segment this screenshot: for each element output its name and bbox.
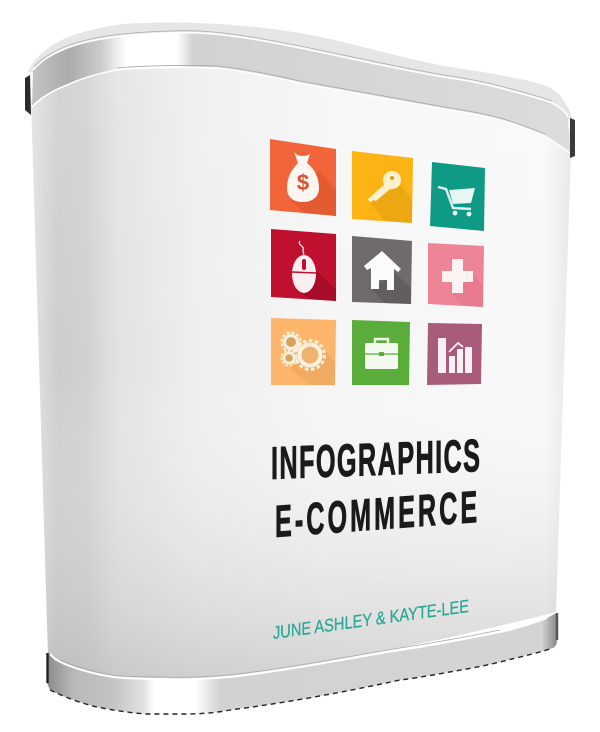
icon: computer mouse <box>271 229 336 301</box>
icon grid <box>270 139 485 385</box>
icon: shopping cart <box>430 162 485 231</box>
authors: JUNE ASHLEY & KAYTE-LEE <box>273 596 469 643</box>
icon: key <box>352 151 413 223</box>
icon: money bag: $ <box>297 170 309 195</box>
bottom rim <box>47 613 557 714</box>
box body <box>31 58 571 680</box>
icon: gears <box>271 318 336 385</box>
icon: money bag <box>270 139 336 216</box>
right clip <box>570 118 575 158</box>
icon: house <box>352 236 412 304</box>
icon: briefcase <box>352 320 410 385</box>
title line: E-COMMERCE: E-COMMERCE <box>275 481 477 547</box>
icon: bar chart <box>427 323 482 385</box>
top lid <box>28 23 572 153</box>
title line: INFOGRAPHICS: INFOGRAPHICS <box>271 429 480 489</box>
icon: plus sign <box>428 243 484 307</box>
left clip <box>25 75 31 115</box>
